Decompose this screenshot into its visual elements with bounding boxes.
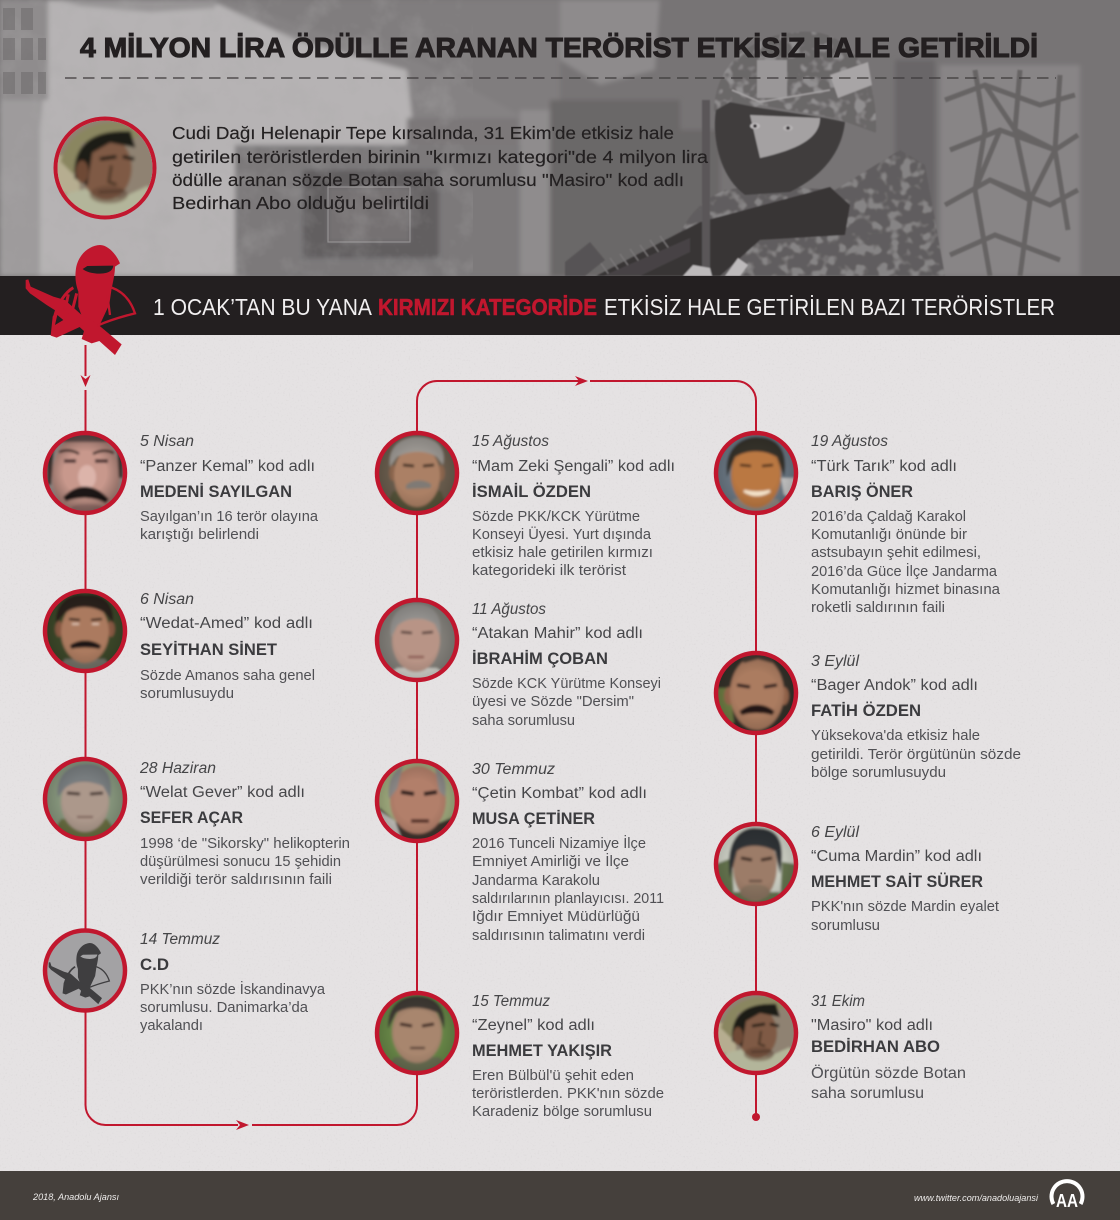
name: İSMAİL ÖZDEN <box>472 482 591 501</box>
name: SEYİTHAN SİNET <box>140 640 278 659</box>
description <box>472 1068 664 1120</box>
description: Eren Bülbül'ü şehit eden <box>472 1068 634 1084</box>
description <box>472 834 664 944</box>
description <box>140 668 315 702</box>
portrait <box>716 653 796 733</box>
description: Örgütün sözde Botan <box>811 1064 966 1082</box>
description: etkisiz hale getirilen kırmızı <box>472 545 653 561</box>
description <box>140 509 319 543</box>
description: PKK'nın sözde Mardin eyalet <box>811 899 999 915</box>
twitter url: www.twitter.com/anadoluajansi <box>914 1193 1039 1204</box>
description: Karadeniz bölge sorumlusu <box>472 1104 652 1120</box>
code name: “Mam Zeki Şengali” kod adlı <box>472 458 675 475</box>
description: Jandarma Karakolu <box>472 873 600 889</box>
code name: "Masiro" kod adlı <box>811 1017 933 1034</box>
description <box>140 836 350 888</box>
description: roketli saldırının faili <box>811 600 945 616</box>
description: Komutanlığı önünde bir <box>811 527 967 543</box>
portrait <box>45 759 125 839</box>
description: PKK’nın sözde İskandinavya <box>140 980 326 998</box>
description: teröristlerden. PKK'nın sözde <box>472 1086 664 1102</box>
code name: “Türk Tarık” kod adlı <box>811 458 957 475</box>
timeline path with arrows <box>80 345 760 1130</box>
portrait <box>377 761 457 841</box>
portrait <box>716 993 796 1073</box>
code name: “Atakan Mahir” kod adlı <box>472 625 643 642</box>
intro text: getirilen teröristlerden birinin "kırmızı kategori"de 4 milyon lira <box>172 147 708 167</box>
portrait <box>377 993 457 1073</box>
description: 1998 ‘de "Sikorsky" helikopterin <box>140 836 350 852</box>
description: Sözde KCK Yürütme Konseyi <box>472 676 661 692</box>
description <box>811 509 1001 616</box>
description <box>811 728 1021 781</box>
entry: İsmail Özden <box>377 433 675 579</box>
name: MEDENİ SAYILGAN <box>140 482 292 501</box>
description <box>811 1064 966 1102</box>
code name: “Çetin Kombat” kod adlı <box>472 785 647 802</box>
date: 5 Nisan <box>140 433 194 450</box>
description: getirildi. Terör örgütünün sözde <box>811 747 1021 763</box>
date: 15 Ağustos <box>472 433 549 450</box>
description <box>472 676 661 729</box>
name: MEHMET SAİT SÜRER <box>811 872 983 891</box>
date: 19 Ağustos <box>811 433 888 450</box>
code name: “Bager Andok” kod adlı <box>811 677 978 694</box>
branch pattern <box>945 70 1078 276</box>
wall texture <box>236 0 473 276</box>
description: 2016’da Güce İlçe Jandarma <box>811 562 998 580</box>
name: BARIŞ ÖNER <box>811 482 913 501</box>
date: 28 Haziran <box>139 760 216 777</box>
name: MEHMET YAKIŞIR <box>472 1041 612 1060</box>
description: Iğdır Emniyet Müdürlüğü <box>472 909 640 925</box>
intro text: Bedirhan Abo olduğu belirtildi <box>172 193 429 213</box>
name: C.D <box>140 955 169 974</box>
title: 4 MİLYON LİRA ÖDÜLLE ARANAN TERÖRİST ETKİSİZ HALE GETİRİLDİ <box>80 32 1038 63</box>
date: 31 Ekim <box>811 993 865 1010</box>
entry: Mehmet Yakışır <box>377 993 664 1120</box>
description: bölge sorumlusuydu <box>811 765 946 781</box>
band heading text: KIRMIZI KATEGORİDE <box>378 294 597 320</box>
description: saldırılarının planlayıcısı. 2011 <box>472 891 664 907</box>
description: kategorideki ilk terörist <box>472 563 626 579</box>
description: Konseyi Üyesi. Yurt dışında <box>472 525 652 543</box>
date: 14 Temmuz <box>140 931 220 948</box>
entry: Seyithan Sinet <box>45 591 315 702</box>
entry: Bedirhan Abo <box>716 993 966 1102</box>
description: verildiği terör saldırısının faili <box>140 872 332 888</box>
portrait <box>377 600 457 680</box>
description: Sözde PKK/KCK Yürütme <box>472 509 640 525</box>
intro text <box>172 123 708 213</box>
code name: “Wedat-Amed” kod adlı <box>140 615 313 632</box>
description: Emniyet Amirliği ve İlçe <box>472 852 629 870</box>
description: Sözde Amanos saha genel <box>140 668 315 684</box>
footer bar <box>0 1171 1120 1220</box>
description: karıştığı belirlendi <box>140 527 259 543</box>
entry: Musa Çetiner <box>377 761 664 944</box>
header photo: soldier in ruined building <box>0 0 1120 276</box>
description <box>811 899 999 934</box>
date: 30 Temmuz <box>472 761 555 778</box>
portrait <box>716 824 796 904</box>
logo: Anadolu Ajansı <box>1051 1181 1082 1211</box>
date: 11 Ağustos <box>472 601 546 618</box>
description: sorumlusu. Danimarka’da <box>140 1000 309 1016</box>
description: astsubayın şehit edilmesi, <box>811 545 981 561</box>
name: SEFER AÇAR <box>140 808 243 827</box>
intro text: ödülle aranan sözde Botan saha sorumlusu "Masiro" kod adlı <box>172 170 684 190</box>
entry: Sefer Açar <box>45 759 350 888</box>
name: İBRAHİM ÇOBAN <box>472 649 608 668</box>
logo: Anadolu Ajansı: AA <box>1056 1191 1078 1211</box>
band heading text: 1 OCAK’TAN BU YANA <box>153 294 373 320</box>
portrait placeholder icon <box>45 930 125 1010</box>
entry: Medeni Sayılgan <box>45 433 319 543</box>
description: sorumlusuydu <box>140 686 234 702</box>
description: Sayılgan’ın 16 terör olayına <box>140 509 319 525</box>
portrait <box>45 433 125 519</box>
description: sorumlusu <box>811 918 880 934</box>
portrait <box>716 433 796 513</box>
name: MUSA ÇETİNER <box>472 809 595 828</box>
description: saldırısının talimatını verdi <box>472 928 645 944</box>
copyright: 2018, Anadolu Ajansı <box>32 1192 119 1203</box>
intro portrait: Bedirhan Abo <box>54 117 156 219</box>
description: Komutanlığı hizmet binasına <box>811 582 1001 598</box>
entry: Barış Öner <box>716 433 1001 616</box>
name: BEDİRHAN ABO <box>811 1037 940 1056</box>
portrait <box>45 591 125 671</box>
description: düşürülmesi sonucu 15 şehidin <box>140 854 341 870</box>
description: 2016 Tunceli Nizamiye İlçe <box>472 834 646 852</box>
portrait <box>377 433 457 513</box>
code name: “Welat Gever” kod adlı <box>140 784 305 801</box>
icon: red terrorist with rifle <box>26 245 135 355</box>
entry: C.D <box>45 930 326 1034</box>
dark heading band <box>0 276 1120 335</box>
entry: Mehmet Sait Sürer <box>716 824 999 934</box>
band heading text: ETKİSİZ HALE GETİRİLEN BAZI TERÖRİSTLER <box>604 294 1055 320</box>
code name: “Zeynel” kod adlı <box>472 1017 595 1034</box>
description: üyesi ve Sözde "Dersim" <box>472 694 634 710</box>
description <box>140 980 326 1034</box>
name: FATİH ÖZDEN <box>811 701 921 720</box>
entry: Fatih Özden <box>716 653 1021 781</box>
date: 6 Eylül <box>811 824 860 841</box>
date: 6 Nisan <box>140 591 194 608</box>
description: saha sorumlusu <box>811 1085 924 1102</box>
date: 15 Temmuz <box>472 993 550 1010</box>
date: 3 Eylül <box>811 653 860 670</box>
code name: “Cuma Mardin” kod adlı <box>811 848 982 865</box>
description <box>472 509 653 579</box>
description: yakalandı <box>140 1018 203 1034</box>
band heading text <box>153 294 1055 320</box>
description: 2016’da Çaldağ Karakol <box>811 509 966 525</box>
intro text: Cudi Dağı Helenapir Tepe kırsalında, 31 Ekim'de etkisiz hale <box>172 123 674 143</box>
description: Yüksekova'da etkisiz hale <box>811 728 980 744</box>
entry: İbrahim Çoban <box>377 600 661 729</box>
code name: “Panzer Kemal” kod adlı <box>140 458 315 475</box>
description: saha sorumlusu <box>472 713 575 729</box>
